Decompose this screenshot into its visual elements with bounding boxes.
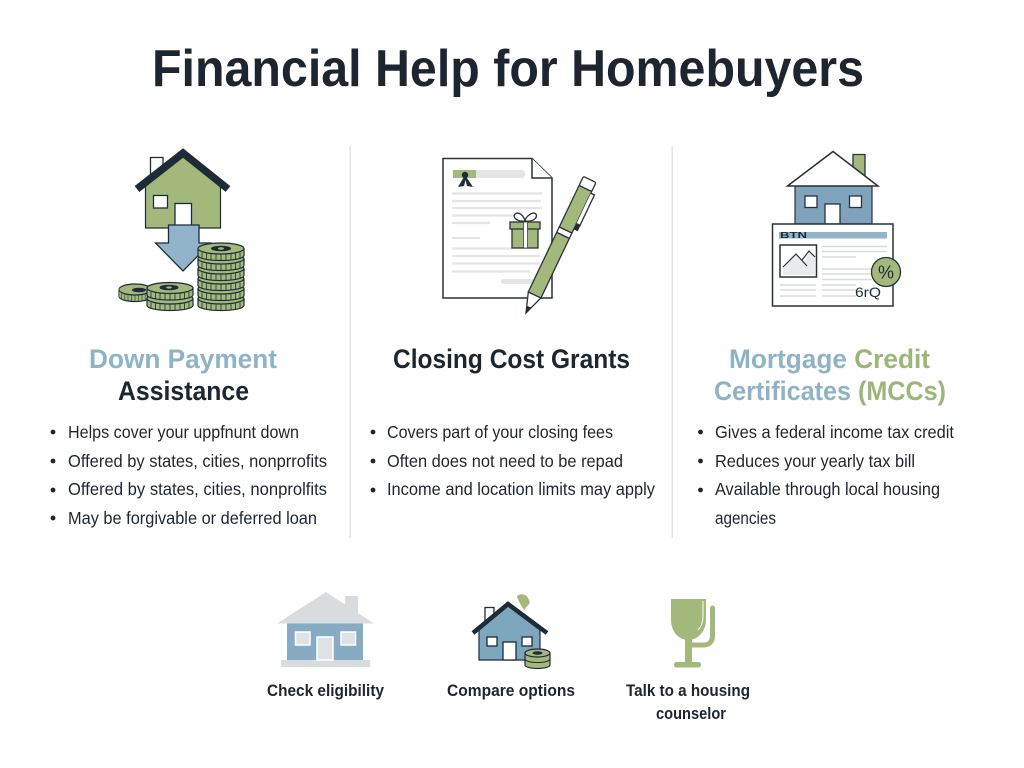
heading: down payment assistance — [89, 344, 277, 406]
step: talk to a housing counselor — [626, 599, 750, 723]
panel: mortgage credit certificates — [698, 152, 954, 528]
heading: down payment assistance: Down Payment — [89, 344, 277, 374]
caption: talk to a housing counselor — [626, 682, 750, 723]
heading: mortgage credit certificates — [714, 344, 946, 406]
icon: green goblet shape — [671, 599, 712, 668]
panel: closing cost grants — [371, 158, 655, 499]
heading: mortgage credit certificates: Mortgage Credit — [729, 344, 930, 374]
caption: talk to a housing counselor: Talk to a housing — [626, 682, 750, 700]
icon: house on certificate with percent badge: % — [878, 262, 894, 282]
icon: house with down arrow and coins — [119, 153, 244, 311]
icon: house on certificate with percent badge — [772, 152, 900, 306]
icon: document with gift and pen — [443, 158, 600, 318]
bullet list: down payment assistance: Offered by states, cities, nonprolfits — [68, 479, 327, 499]
heading: mortgage credit certificates: Certificates (MCCs) — [714, 376, 946, 406]
divider right — [672, 146, 673, 538]
caption: talk to a housing counselor: counselor — [656, 705, 727, 723]
bullet list: down payment assistance: May be forgivable or deferred loan — [68, 508, 317, 528]
bullet list: mortgage credit certificates: Reduces your yearly tax bill — [715, 451, 915, 471]
bullet list: closing cost grants — [371, 422, 655, 499]
bullet list: mortgage credit certificates — [698, 422, 954, 528]
bullet list: closing cost grants: Income and location limits may apply — [387, 479, 655, 499]
heading: closing cost grants: Closing Cost Grants — [393, 344, 630, 374]
caption: compare options: Compare options — [447, 682, 575, 700]
bullet list: closing cost grants: Often does not need to be repad — [387, 451, 623, 471]
bullet list: down payment assistance: Helps cover your uppfnunt down — [68, 422, 299, 442]
icon: pale house — [277, 592, 374, 667]
caption: check eligibility: Check eligibility — [267, 682, 385, 700]
bullet list: mortgage credit certificates: Gives a federal income tax credit — [715, 422, 954, 442]
icon: house on certificate with percent badge: 6rQ — [855, 284, 881, 300]
heading: down payment assistance: Assistance — [118, 376, 249, 406]
bullet list: mortgage credit certificates: agencies — [715, 508, 776, 528]
icon: house on certificate with percent badge: BTN — [780, 231, 807, 240]
bullet list: closing cost grants: Covers part of your closing fees — [387, 422, 613, 442]
step: check eligibility — [267, 592, 385, 700]
divider left — [350, 146, 351, 538]
icon: house with coins and leaf — [473, 594, 550, 669]
bullet list: mortgage credit certificates: Available through local housing — [715, 479, 940, 499]
title: Financial Help for Homebuyers — [152, 40, 864, 98]
step: compare options — [447, 594, 575, 700]
bullet list: down payment assistance — [51, 422, 327, 528]
panel: down payment assistance — [51, 153, 327, 528]
bullet list: down payment assistance: Offered by states, cities, nonprrofits — [68, 451, 327, 471]
